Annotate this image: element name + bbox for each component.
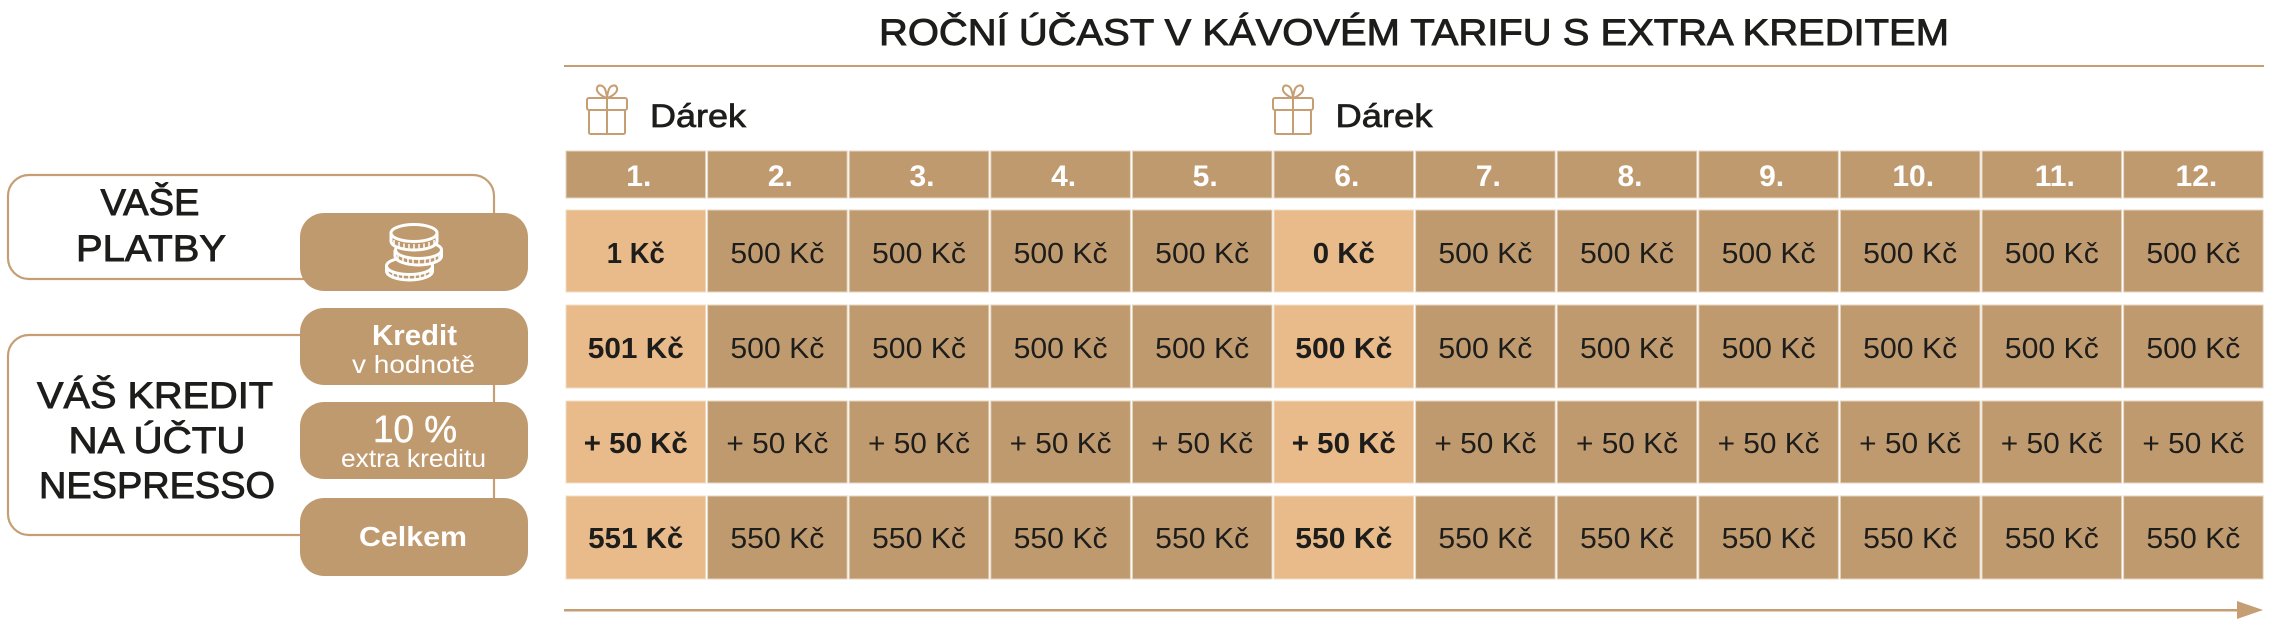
row: total: 550 Kč: [1014, 523, 1108, 555]
row: extra credit: + 50 Kč: [1151, 428, 1253, 460]
row: payments: 500 Kč: [1014, 238, 1108, 270]
row: payments: 500 Kč: [730, 238, 824, 270]
heading: your payments: VAŠE: [100, 182, 200, 223]
heading: your payments: [76, 182, 226, 269]
month header row: [566, 151, 2263, 198]
arrow: time axis: [564, 601, 2263, 619]
gift label: Dárek: [650, 98, 747, 134]
row: extra credit: + 50 Kč: [726, 428, 828, 460]
heading: your credit: [37, 375, 275, 506]
row: payments: 500 Kč: [1863, 238, 1957, 270]
icon: coins: [386, 224, 442, 280]
month header row: 8.: [1617, 160, 1643, 193]
row: extra credit: [566, 401, 2263, 483]
row: total: 550 Kč: [872, 523, 966, 555]
pill: 10 percent extra credit: [300, 402, 528, 479]
row: payments: 0 Kč: [1313, 238, 1375, 270]
row: total: 550 Kč: [1722, 523, 1816, 555]
row: total: 550 Kč: [2146, 523, 2240, 555]
row: payments: 500 Kč: [1155, 238, 1249, 270]
pill: coins: [300, 213, 528, 291]
credit outline: [8, 335, 310, 535]
row: payments: [566, 210, 2263, 292]
month header row: 2.: [768, 160, 793, 193]
icon: gift: [1273, 85, 1313, 134]
row: credit value: 500 Kč: [2146, 333, 2240, 365]
row: extra credit: + 50 Kč: [868, 428, 970, 460]
row: credit value: 500 Kč: [730, 333, 824, 365]
row: total: 550 Kč: [1580, 523, 1674, 555]
row: extra credit: + 50 Kč: [1859, 428, 1961, 460]
row: total: 550 Kč: [730, 523, 824, 555]
row: payments: 500 Kč: [872, 238, 966, 270]
row: credit value: 500 Kč: [1155, 333, 1249, 365]
pill: total: [300, 498, 528, 576]
icon: gift: [587, 85, 627, 134]
row: extra credit: + 50 Kč: [1576, 428, 1678, 460]
gift marker month 6: [1273, 85, 1434, 134]
month header row: 11.: [2035, 160, 2075, 193]
month header row: 12.: [2176, 160, 2217, 193]
month header row: 9.: [1759, 160, 1784, 193]
heading: your payments: PLATBY: [76, 228, 226, 269]
row: payments: 500 Kč: [2146, 238, 2240, 270]
row: credit value: 500 Kč: [1438, 333, 1532, 365]
pill: credit value: [300, 308, 528, 385]
panel: your payments: [8, 175, 528, 291]
row: total: 551 Kč: [588, 523, 683, 555]
pill: total: Celkem: [359, 521, 467, 552]
pill: 10 percent extra credit: extra kreditu: [341, 445, 486, 473]
row: payments: 1 Kč: [607, 238, 665, 270]
row: extra credit: + 50 Kč: [1010, 428, 1112, 460]
row: credit value: 501 Kč: [588, 333, 684, 365]
gift label: Dárek: [1336, 98, 1434, 134]
gift marker month 1: [587, 85, 747, 134]
row: extra credit: + 50 Kč: [2001, 428, 2103, 460]
row: extra credit: + 50 Kč: [1718, 428, 1820, 460]
row: total: 550 Kč: [1155, 523, 1249, 555]
row: extra credit: + 50 Kč: [584, 428, 688, 460]
month header row: 1.: [626, 160, 651, 193]
pill: credit value: Kredit: [372, 320, 457, 352]
row: extra credit: + 50 Kč: [1292, 428, 1396, 460]
panel: your credit: [8, 308, 528, 576]
row: total: 550 Kč: [1863, 523, 1957, 555]
pill: 10 percent extra credit: 10 %: [373, 409, 457, 451]
month header row: 10.: [1892, 160, 1934, 193]
row: extra credit: + 50 Kč: [2142, 428, 2244, 460]
month header row: 7.: [1476, 160, 1501, 193]
row: total: [566, 496, 2263, 579]
heading: your credit: NESPRESSO: [39, 465, 275, 506]
row: credit value: 500 Kč: [1580, 333, 1674, 365]
row: payments: 500 Kč: [1722, 238, 1816, 270]
row: total: 550 Kč: [2005, 523, 2099, 555]
title: ROČNÍ ÚČAST V KÁVOVÉM TARIFU S EXTRA KREDITEM: [879, 12, 1949, 53]
title rule: [564, 65, 2264, 67]
month header row: 4.: [1051, 160, 1076, 193]
heading: your credit: NA ÚČTU: [68, 420, 245, 461]
row: credit value: 500 Kč: [1722, 333, 1816, 365]
month header row: 3.: [909, 160, 935, 193]
row: extra credit: + 50 Kč: [1434, 428, 1536, 460]
row: payments: 500 Kč: [1438, 238, 1532, 270]
heading: your credit: VÁŠ KREDIT: [37, 375, 273, 416]
row: payments: 500 Kč: [2005, 238, 2099, 270]
row: credit value: 500 Kč: [872, 333, 966, 365]
pill: credit value: v hodnotě: [352, 351, 475, 379]
row: credit value: 500 Kč: [1014, 333, 1108, 365]
row: credit value: 500 Kč: [2005, 333, 2099, 365]
month header row: 5.: [1193, 160, 1218, 193]
row: payments: 500 Kč: [1580, 238, 1674, 270]
row: total: 550 Kč: [1438, 523, 1532, 555]
row: credit value: 500 Kč: [1295, 333, 1392, 365]
row: total: 550 Kč: [1295, 523, 1392, 555]
month header row: 6.: [1334, 160, 1359, 193]
connectors: [493, 380, 495, 502]
row: credit value: [566, 305, 2263, 388]
row: credit value: 500 Kč: [1863, 333, 1957, 365]
payments outline: [8, 175, 494, 279]
